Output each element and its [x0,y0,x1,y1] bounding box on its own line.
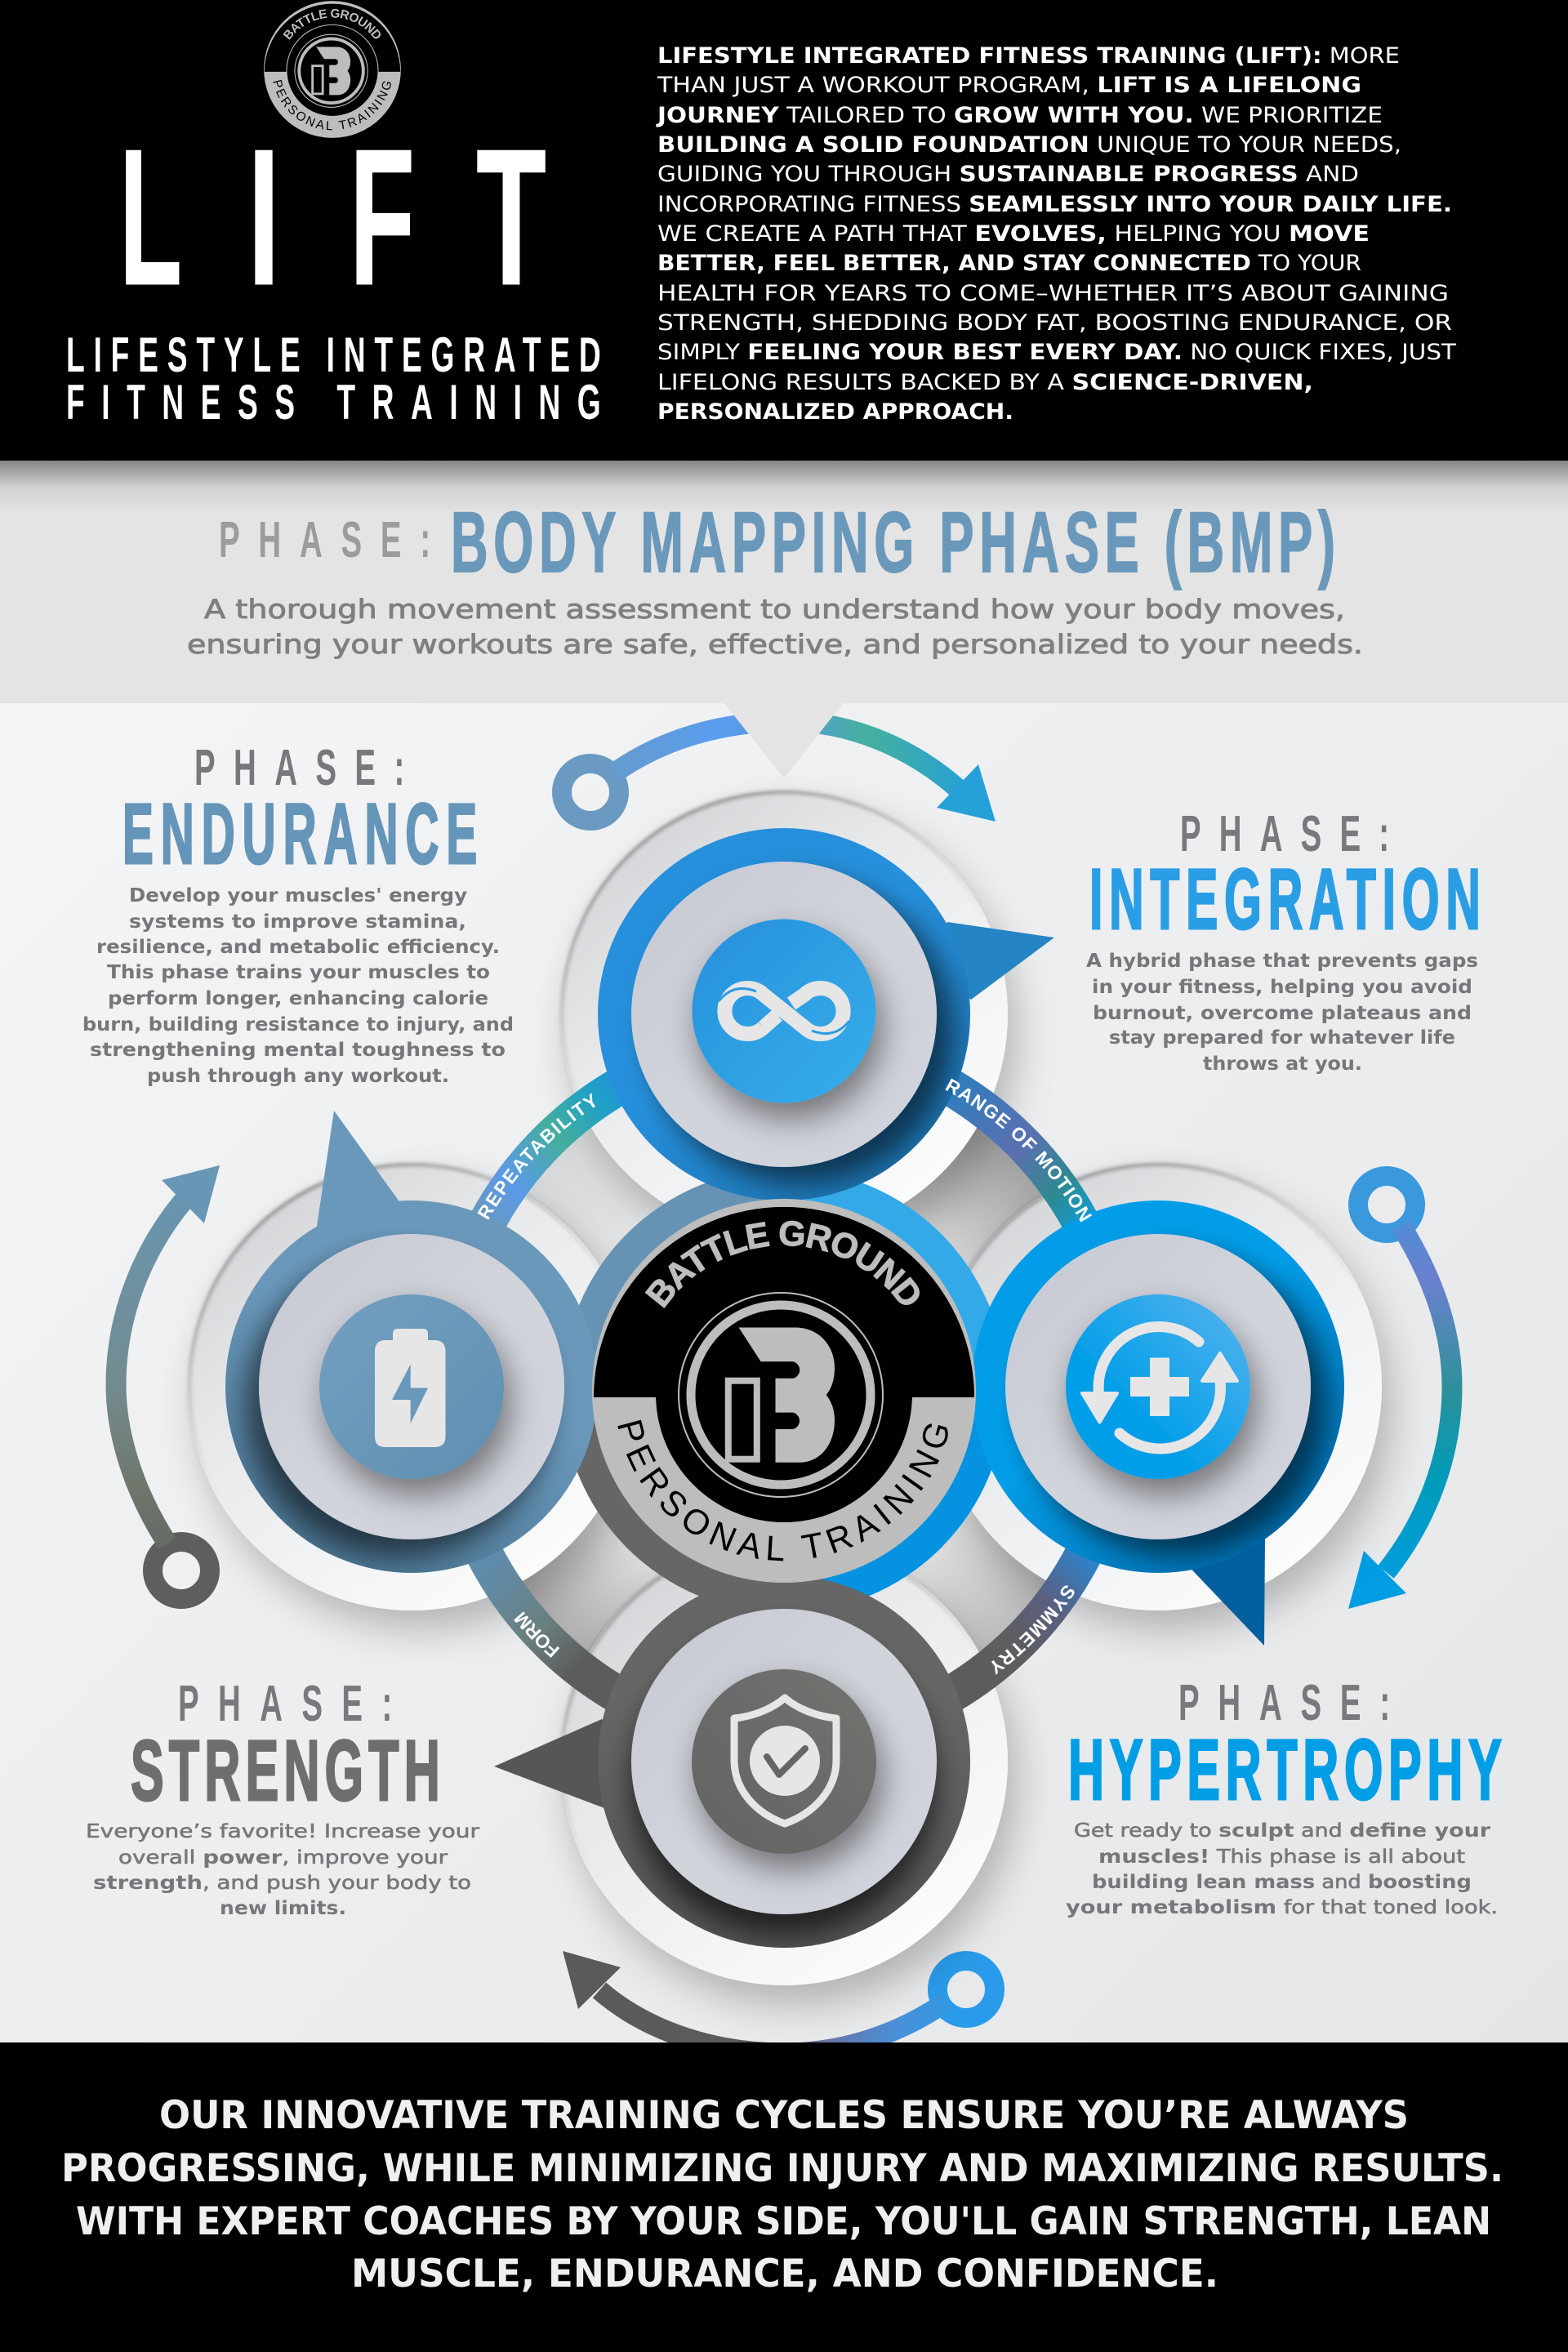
outer disc: right [934,1163,1382,1610]
text: strength description: strength , and push your body to [93,1873,471,1894]
text: endurance description: This phase trains your muscles to [107,962,490,983]
text: integration description [1086,951,1478,1075]
node: strength circle [494,1575,970,1948]
icon: shield with check [692,1669,876,1854]
label: symmetry: SYMMETRY [991,1585,1075,1675]
text: LIFT introduction: STRENGTH, SHEDDING BODY FAT, BOOSTING ENDURANCE, OR [657,310,1452,336]
chart: central cycle background [441,1048,1127,1734]
arrow: right cycle arrow [1348,1176,1452,1609]
outer disc: bottom [560,1538,1008,1985]
logo: small Battle Ground emblem [264,1,401,138]
text: LIFT introduction: HEALTH FOR YEARS TO COME–WHETHER IT’S ABOUT GAINING [657,281,1449,306]
logo: small Battle Ground emblem: PERSONAL TRAINING [270,78,395,133]
heading: phase: PHASE: [178,1675,392,1731]
arrow: bottom cycle arrow [563,1951,995,2053]
text: LIFT introduction: LIFESTYLE INTEGRATED FITNESS TRAINING (LIFT): MORE [657,43,1400,69]
text: LIFT introduction: JOURNEY TAILORED TO GROW WITH YOU. WE PRIORITIZE [656,103,1383,128]
text: hypertrophy description: your metabolism for that toned look. [1066,1897,1498,1918]
subtitle: lifestyle integrated fitness training: FITNESS TRAINING [66,375,601,430]
text: LIFT introduction: THAN JUST A WORKOUT PROGRAM, LIFT IS A LIFELONG [657,73,1361,98]
heading: hypertrophy: HYPERTROPHY [1068,1722,1502,1818]
title: LIFT: T [476,109,546,326]
title: LIFT: F [350,109,415,326]
title: LIFT: I [247,109,280,326]
text: integration description: throws at you. [1203,1054,1362,1075]
heading: phase: PHASE: [1178,1674,1390,1731]
text: hypertrophy description: building lean mass and boosting [1092,1872,1472,1893]
text: endurance description [82,885,514,1087]
ring: centre ring quadrants [562,1169,1006,1613]
text: band description: ensuring your workouts are safe, effective, and personalized to your needs. [187,629,1363,660]
label: range of motion: RANGE OF MOTION [945,1078,1092,1222]
text: endurance description: strengthening mental toughness to [90,1040,506,1061]
heading: integration: INTEGRATION [1089,852,1481,947]
label: form: FORM [514,1611,560,1658]
text: integration description: stay prepared for whatever life [1109,1027,1455,1049]
subtitle: lifestyle integrated fitness training [66,327,601,430]
text: endurance description: perform longer, enhancing calorie [108,988,488,1009]
panel: strength [86,1675,480,1919]
heading: strength: STRENGTH [131,1723,440,1819]
panel: header [0,0,1568,461]
text: endurance description: burn, building resistance to injury, and [82,1014,514,1036]
text: endurance description: resilience, and metabolic efficiency. [96,937,500,958]
text: Personal Training: PERSONAL TRAINING [609,1415,959,1569]
panel: body mapping phase band [0,457,1568,778]
outer disc: top [560,791,1008,1238]
text: integration description: A hybrid phase that prevents gaps [1086,951,1478,972]
text: strength description: Everyone’s favorite! Increase your [86,1821,480,1842]
text: band description: A thorough movement assessment to understand how your body moves, [204,594,1345,625]
text: LIFT introduction: GUIDING YOU THROUGH SUSTAINABLE PROGRESS AND [657,162,1359,187]
panel: hypertrophy [1066,1674,1502,1918]
title: LIFT [119,109,546,326]
heading: phase label: PHASE: [219,511,430,568]
text: footer statement: OUR INNOVATIVE TRAINING CYCLES ENSURE YOU’RE ALWAYS [159,2093,1409,2138]
ring: connecting ring segments [455,1052,1113,1730]
panel: footer [0,2042,1568,2352]
text: footer statement: WITH EXPERT COACHES BY YOUR SIDE, YOU'LL GAIN STRENGTH, LEAN [76,2199,1491,2244]
heading: phase: PHASE: [194,739,404,795]
heading: phase: PHASE: [1180,805,1389,862]
panel: endurance [82,739,514,1087]
logo: central Battle Ground emblem [592,1199,976,1583]
arrow: top cycle arrow [562,721,996,822]
icon: infinity [693,920,875,1102]
text: LIFT introduction: PERSONALIZED APPROACH. [657,399,1013,425]
text: endurance description: systems to improve stamina, [129,911,466,933]
text: strength description: overall power , improve your [118,1847,448,1869]
text: endurance description: push through any workout. [147,1066,449,1087]
text: LIFT introduction: LIFELONG RESULTS BACKED BY A SCIENCE-DRIVEN, [657,370,1313,395]
node: integration circle [598,828,1054,1200]
logo: small Battle Ground emblem: BATTLE GROUND [281,7,384,42]
text: hypertrophy description: Get ready to sculpt and define your [1074,1820,1491,1842]
outer disc: left [188,1163,635,1610]
text: band description [187,594,1363,660]
labels: ring captions [473,1074,1096,1678]
node: hypertrophy circle [972,1200,1344,1646]
text: footer statement: MUSCLE, ENDURANCE, AND CONFIDENCE. [351,2252,1218,2296]
heading: body mapping phase: BODY MAPPING PHASE (BMP) [451,496,1335,590]
arrow: left cycle arrow [116,1165,220,1599]
text: footer statement [61,2093,1503,2296]
text: endurance description: Develop your muscles' energy [129,885,467,906]
title: LIFT: L [119,109,182,326]
icon: recovery cycle with plus [1066,1294,1250,1479]
text: LIFT introduction: WE CREATE A PATH THAT EVOLVES, HELPING YOU MOVE [657,221,1370,247]
text: footer statement: PROGRESSING, WHILE MINIMIZING INJURY AND MAXIMIZING RESULTS. [61,2146,1503,2191]
text: LIFT introduction: INCORPORATING FITNESS SEAMLESSLY INTO YOUR DAILY LIFE. [657,192,1452,217]
text: hypertrophy description: muscles! This phase is all about [1098,1846,1465,1868]
subtitle: lifestyle integrated fitness training: LIFESTYLE INTEGRATED [66,327,601,382]
text: LIFT introduction: BETTER, FEEL BETTER, AND STAY CONNECTED TO YOUR [657,251,1361,276]
text: LIFT introduction [656,43,1457,425]
icon: battery [319,1294,504,1479]
text: integration description: in your fitness, helping you avoid [1092,977,1472,998]
text: integration description: burnout, overcome plateaus and [1093,1003,1472,1024]
text: hypertrophy description [1066,1820,1498,1918]
text: LIFT introduction: SIMPLY FEELING YOUR BEST EVERY DAY. NO QUICK FIXES, JUST [657,340,1457,365]
panel: integration [1086,805,1481,1075]
text: LIFT introduction: BUILDING A SOLID FOUNDATION UNIQUE TO YOUR NEEDS, [657,132,1401,158]
node: endurance circle [225,1111,598,1573]
label: repeatability: REPEATABILITY [477,1093,595,1220]
heading: endurance: ENDURANCE [122,786,477,881]
text: strength description: new limits. [220,1898,346,1919]
text: Battle Ground: BATTLE GROUND [645,1220,920,1308]
text: strength description [86,1821,480,1919]
